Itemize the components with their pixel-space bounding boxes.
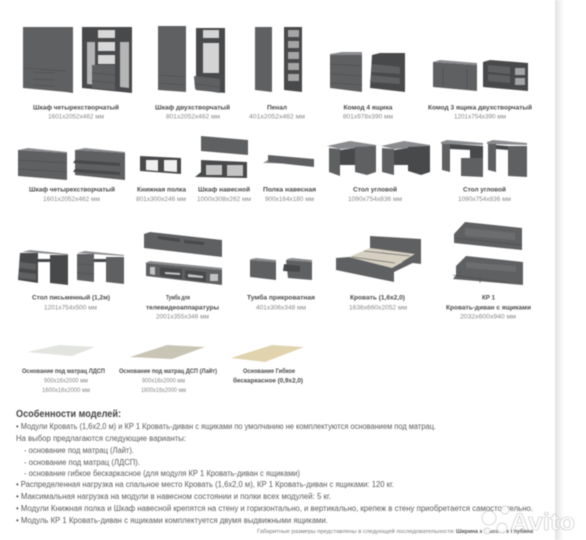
item: four-door wardrobe: Шкаф четырехстворчатый [33,104,119,112]
item: corner desk, right: Стол угловой [463,186,506,194]
item: writing desk [18,250,124,312]
features text block: - основание под матрац (ЛДСП). [24,458,140,467]
item: corner desk, right [441,140,527,203]
features text block: На выбор предлагаются следующие варианты: [16,434,186,443]
item: chest of 3 drawers with doors [428,60,532,120]
item: four-door wardrobe [23,27,132,120]
dimensions footnote: Габаритные размеры представлены в следующей последовательности: [257,528,455,535]
features text block: • Модули Книжная полка и Шкаф навесной крепятся на стену и горизонтально, и вертикально, крепеж в стену приобретается самостоятельно. [16,504,533,513]
item: KR1 sofa bed: КР 1 [482,294,495,302]
features text block: • Максимальная нагрузка на модули в навесном состоянии и полки всех модулей: 5 кг. [16,492,331,501]
item: chest of 4 drawers [330,52,405,120]
features text block: • Распределенная нагрузка на спальное место Кровать (1,6x2,0 м), КР 1 Кровать-диван с ящиками: 120 кг. [16,480,394,489]
item: wall cabinet: Шкаф навесной [198,186,250,194]
dimensions footnote: Ширина х Высота х Глубина [456,528,533,535]
item: DSP mattress base: 900x16x2000 мм [142,378,185,384]
watermark: Avito [482,506,575,536]
item: corner desk, left: 1090x754x836 мм [348,196,402,203]
item: wall shelf: Полка навесная [263,186,316,194]
features text block: - основание гибкое бескаркасное (для модуля КР 1 Кровать-диван с ящиками) [24,469,300,478]
dimensions footnote [257,528,533,535]
item: wall shelf: 900x164x180 мм [265,196,314,203]
features text block: • Модуль КР 1 Кровать-диван с ящиками комплектуется двумя выдвижными ящиками. [16,516,328,525]
features heading: Особенности моделей: [16,408,121,420]
item: wall cabinet [195,136,251,203]
item: chest of 3 drawers with doors: 1201x754x390 мм [454,114,506,120]
item: narrow cabinet: Пенал [267,104,287,112]
item: LDSP mattress base: Основание под матрац ЛДСП [22,368,105,375]
item: flexible frameless base: Основание Гибкое [243,367,295,375]
item: TV stand: Тумба для [166,294,190,302]
watermark: Avito: Avito [510,509,575,536]
item: two-door wardrobe: Шкаф двухстворчатый [155,104,230,112]
item: bed: 1636x660x2052 мм [349,304,407,312]
item: bedside table [247,258,315,312]
features text block: • Модули Кровать (1,6х2,0 м) и КР 1 Кровать-диван с ящиками по умолчанию не комплектуются основанием под матрац. [16,422,436,431]
item: TV stand [144,232,222,320]
features text block [16,422,533,525]
item: writing desk: Стол письменный (1,2м) [32,294,110,302]
item: narrow cabinet: 401x2052x462 мм [249,114,305,120]
item: corner desk, left [327,141,430,203]
item: chest of 4 drawers: Комод 4 ящика [344,104,393,112]
item: bookshelf: Книжная полка [137,186,186,194]
item: bed: Кровать (1,6x2,0) [350,294,405,302]
item: wide chest, row two: 1601x2052x462 мм [43,196,100,203]
item: LDSP mattress base: 900x16x2000 мм [44,378,88,384]
item: writing desk: 1201x754x500 мм [44,304,97,312]
item: four-door wardrobe: 1601x2052x462 мм [48,114,104,120]
item: flexible frameless base [231,345,304,384]
features text block: - основание под матрац (Лайт). [24,446,134,455]
item: bedside table: Тумба прикроватная [247,294,315,302]
item: two-door wardrobe: 801x2052x462 мм [166,114,220,120]
item: KR1 sofa bed: Кровать-диван с ящиками [446,304,531,312]
item: DSP mattress base [119,345,217,394]
item: wide chest, row two [18,148,125,203]
item: TV stand: 2001x355x346 мм [156,314,209,320]
item: bed [336,236,421,312]
item: bookshelf: 801x300x246 мм [136,196,186,203]
item: wall shelf [263,155,316,203]
item: chest of 3 drawers with doors: Комод 3 ящика двухстворчатый [428,104,532,112]
item: chest of 4 drawers: 801x978x390 мм [343,114,393,120]
item: KR1 sofa bed: 2032x600x940 мм [460,314,516,320]
item: DSP mattress base: 1600x16x2000 мм [141,387,186,394]
item: LDSP mattress base [22,345,105,394]
item: wide chest, row two: Шкаф четырехстворчатый [29,186,115,194]
item: bookshelf [136,156,186,203]
item: DSP mattress base: Основание под матрац ДСП (Лайт) [119,367,217,375]
item: bedside table: 401x306x348 мм [256,304,306,312]
item: TV stand: телевидеоаппаратуры [146,304,219,312]
item: two-door wardrobe [155,26,230,120]
item: KR1 sofa bed [446,222,531,320]
item: corner desk, left: Стол угловой [353,186,397,194]
item: LDSP mattress base: 1600x16x2000 мм [42,387,90,394]
item: wall cabinet: 1000x308x262 мм [197,196,251,203]
item: flexible frameless base: бескаркасное (0,9x2,0) [233,376,303,384]
page edge shadow [555,0,564,540]
item: narrow cabinet [249,27,305,120]
item: corner desk, right: 1090x754x836 мм [458,196,511,203]
